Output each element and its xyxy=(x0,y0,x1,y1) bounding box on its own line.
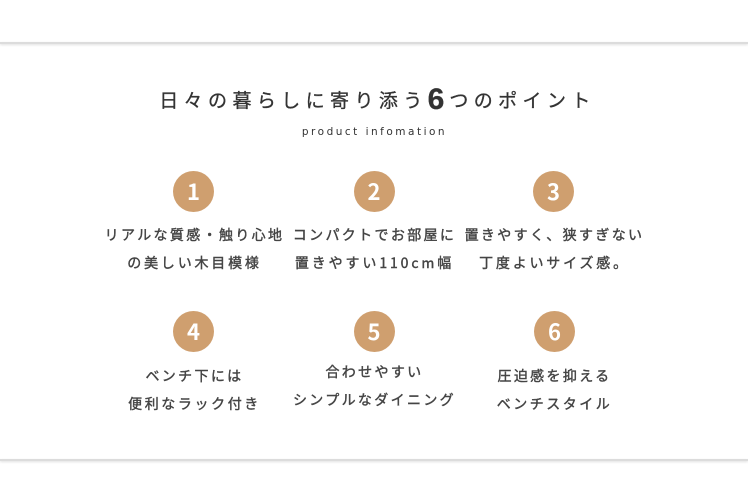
point 6 text: 圧迫感を抑える xyxy=(497,366,612,386)
point 6 text xyxy=(497,366,612,414)
point 1 xyxy=(105,171,284,273)
number badge 2 xyxy=(354,171,394,212)
point 2 text: コンパクトでお部屋に xyxy=(293,225,456,245)
point 3 text: 丁度よいサイズ感。 xyxy=(479,253,630,273)
point 4 xyxy=(128,311,261,414)
point 3 text: 置きやすく、狭すぎない xyxy=(465,225,644,245)
point 4 text: ベンチ下には xyxy=(145,366,244,386)
point 1 text xyxy=(105,225,284,273)
point 4 text xyxy=(128,366,261,414)
number badge 1 xyxy=(173,171,214,212)
point 5 text: 合わせやすい xyxy=(325,362,424,382)
point 5 text xyxy=(293,362,456,410)
number badge 2: 2 xyxy=(368,175,380,207)
point 1 text: リアルな質感・触り心地 xyxy=(105,225,284,245)
number badge 6 xyxy=(534,311,575,352)
number badge 4: 4 xyxy=(187,315,200,347)
point 4 text: 便利なラック付き xyxy=(128,394,261,414)
point 6 xyxy=(497,311,612,414)
point 3 xyxy=(465,171,644,273)
title: 日々の暮らしに寄り添う6つのポイント xyxy=(159,83,596,116)
point 2 text xyxy=(293,225,456,273)
point 2 text: 置きやすい110cm幅 xyxy=(295,253,454,273)
top divider band xyxy=(0,42,748,44)
bottom divider band xyxy=(0,459,748,461)
point 3 text xyxy=(465,225,644,273)
point 5 text: シンプルなダイニング xyxy=(293,390,456,410)
point 2 xyxy=(293,171,456,273)
point 6 text: ベンチスタイル xyxy=(497,394,612,414)
subtitle: product infomation xyxy=(302,126,447,138)
number badge 5: 5 xyxy=(368,315,380,347)
number badge 5 xyxy=(354,311,394,352)
number badge 3: 3 xyxy=(547,175,560,207)
number badge 3 xyxy=(533,171,574,212)
point 1 text: の美しい木目模様 xyxy=(127,253,262,273)
number badge 1: 1 xyxy=(187,175,200,207)
number badge 4 xyxy=(173,311,214,352)
point 5 xyxy=(293,311,456,410)
number badge 6: 6 xyxy=(548,315,561,347)
